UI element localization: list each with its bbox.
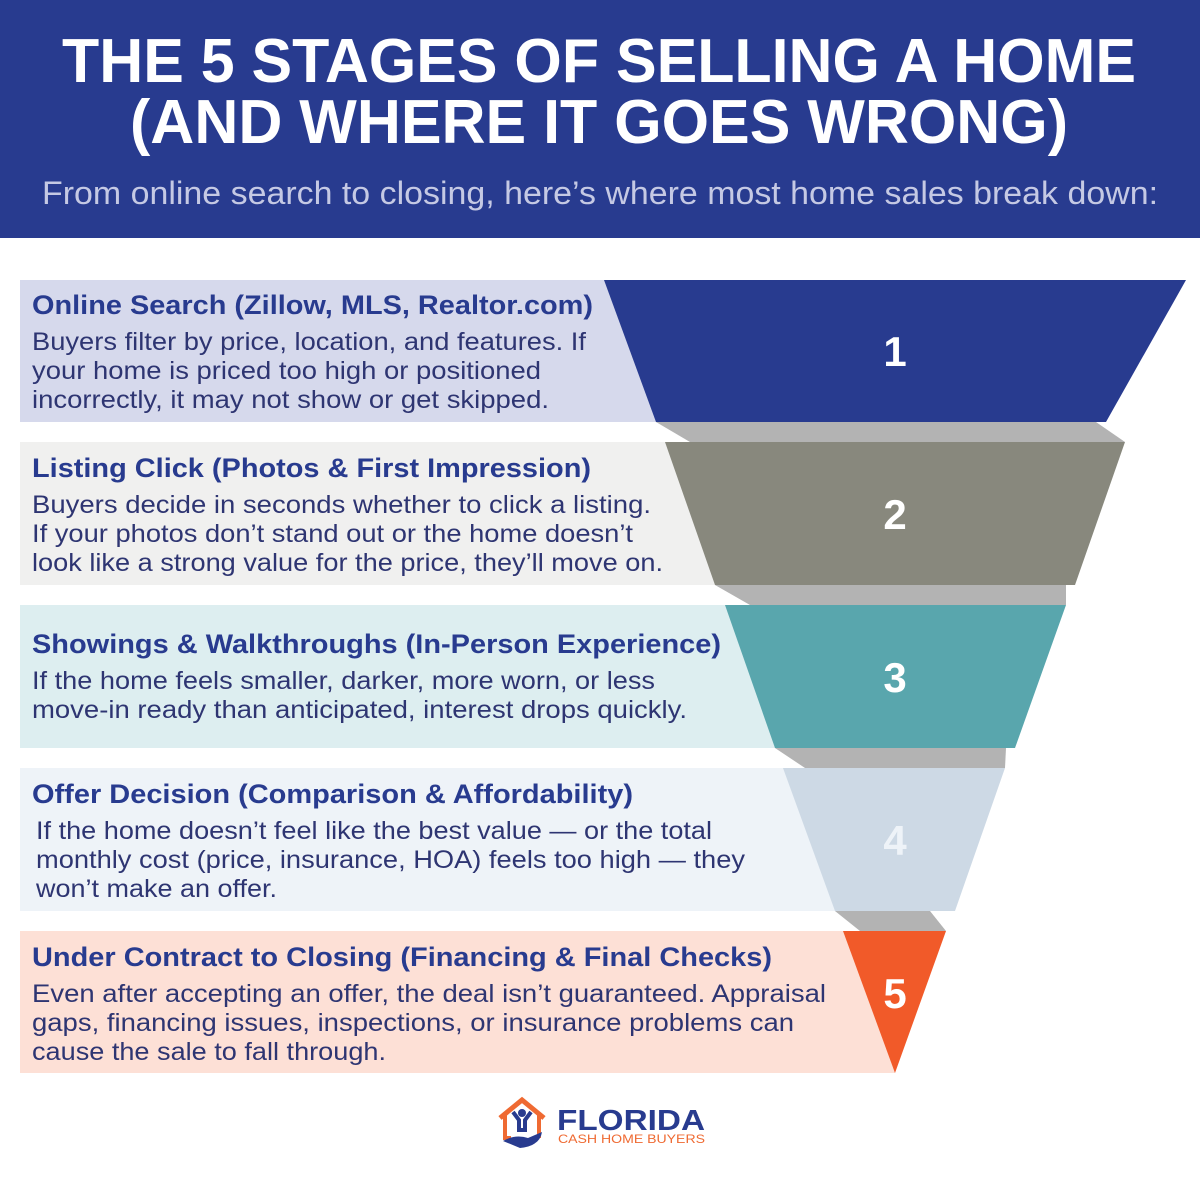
panel 4 text: If the home doesn’t feel like the best value — or the total bbox=[36, 817, 712, 845]
panel 4 text: monthly cost (price, insurance, HOA) feels too high — they bbox=[36, 846, 746, 874]
funnel stage 5: 5 bbox=[883, 970, 907, 1017]
panel 1 text: Buyers filter by price, location, and features. If bbox=[32, 328, 586, 356]
panel 3 text bbox=[32, 629, 721, 724]
funnel stage 5 bbox=[843, 931, 946, 1073]
logo bbox=[500, 1100, 705, 1148]
panel 5 text bbox=[32, 942, 826, 1066]
panel 4 text bbox=[32, 779, 746, 903]
funnel stage 2: 2 bbox=[883, 491, 907, 538]
panel 5 text: gaps, financing issues, inspections, or insurance problems can bbox=[32, 1009, 794, 1037]
panel 5 text: Under Contract to Closing (Financing & Final Checks) bbox=[32, 942, 772, 972]
panel 2 text: If your photos don’t stand out or the home doesn’t bbox=[32, 520, 633, 548]
title: (AND WHERE IT GOES WRONG) bbox=[130, 88, 1068, 157]
panel 3 text: If the home feels smaller, darker, more worn, or less bbox=[32, 667, 655, 695]
funnel stage 4 bbox=[783, 768, 1005, 911]
funnel stage 1 bbox=[604, 280, 1186, 422]
panel 5 text: cause the sale to fall through. bbox=[32, 1038, 386, 1066]
panel 4 text: won’t make an offer. bbox=[35, 875, 277, 903]
panel 1 text: your home is priced too high or positioned bbox=[32, 357, 541, 385]
funnel stage 3: 3 bbox=[883, 654, 907, 701]
funnel stage 4: 4 bbox=[883, 817, 907, 864]
title bbox=[62, 27, 1136, 157]
panel 2 text: Listing Click (Photos & First Impression) bbox=[32, 453, 591, 483]
panel backgrounds bbox=[20, 280, 895, 1073]
panel 2 text: Buyers decide in seconds whether to click a listing. bbox=[32, 491, 651, 519]
panel 1 text: Online Search (Zillow, MLS, Realtor.com) bbox=[32, 290, 593, 320]
subtitle: From online search to closing, here’s where most home sales break down: bbox=[42, 175, 1158, 211]
panel 2 text: look like a strong value for the price, they’ll move on. bbox=[32, 549, 663, 577]
header bbox=[0, 0, 1200, 238]
funnel stage 1: 1 bbox=[883, 328, 907, 375]
logo: FLORIDA bbox=[557, 1105, 705, 1137]
panel 5 text: Even after accepting an offer, the deal isn’t guaranteed. Appraisal bbox=[32, 980, 826, 1008]
panel 1 text: incorrectly, it may not show or get skipped. bbox=[32, 386, 549, 414]
panel 3 text: Showings & Walkthroughs (In-Person Experience) bbox=[32, 629, 721, 659]
title: THE 5 STAGES OF SELLING A HOME bbox=[62, 27, 1136, 96]
funnel stage 2 bbox=[665, 442, 1125, 585]
icon: house with person and hand bbox=[500, 1100, 544, 1148]
funnel connectors bbox=[656, 422, 1125, 931]
panel 1 text bbox=[32, 290, 593, 414]
funnel stage 3 bbox=[725, 605, 1066, 748]
panel 4 text: Offer Decision (Comparison & Affordability) bbox=[32, 779, 633, 809]
panel 3 text: move-in ready than anticipated, interest drops quickly. bbox=[32, 696, 687, 724]
logo: CASH HOME BUYERS bbox=[558, 1132, 705, 1146]
panel 2 text bbox=[32, 453, 663, 577]
